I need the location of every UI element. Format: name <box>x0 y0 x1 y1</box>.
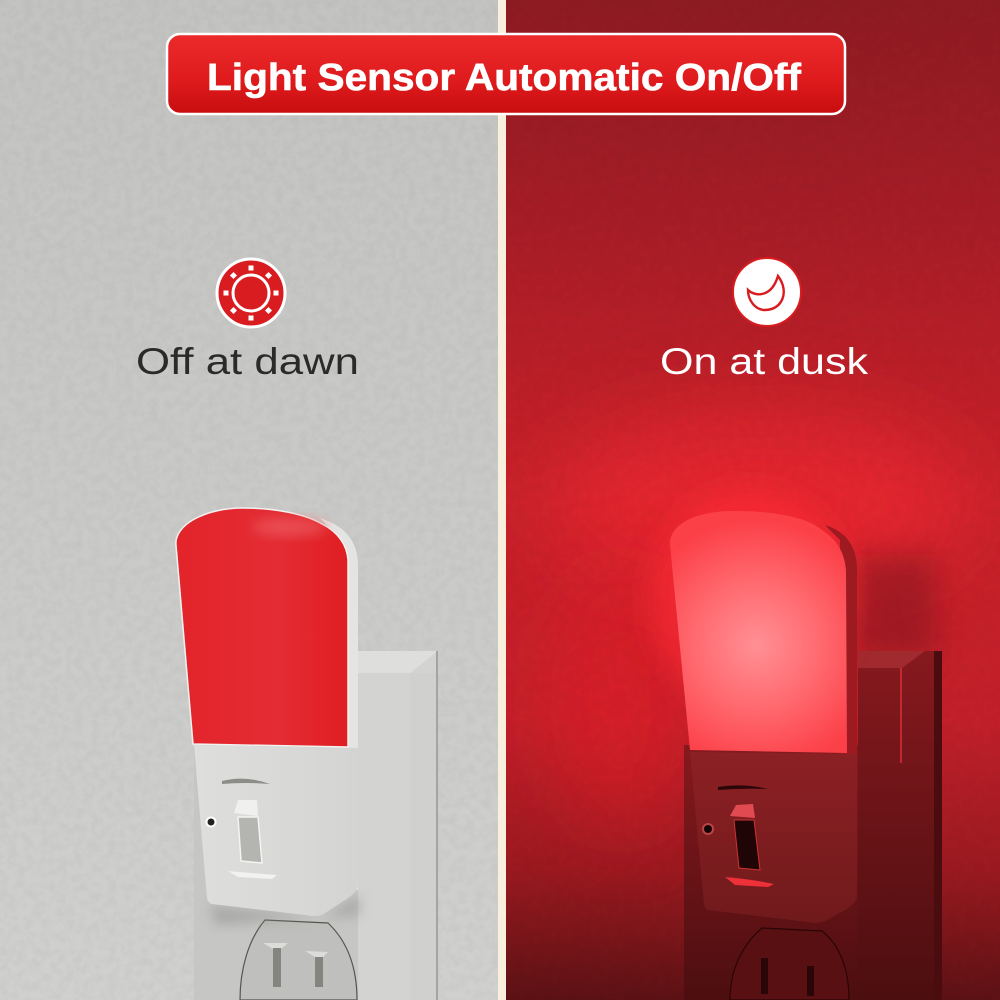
panel: on at dusk wall <box>506 0 1000 1000</box>
housing side strip <box>320 518 358 890</box>
icon: sun <box>217 259 285 327</box>
wall shadow <box>855 555 935 655</box>
glowing shade <box>670 511 847 753</box>
switch <box>206 779 277 879</box>
housing side strip <box>825 525 857 770</box>
night light on, glowing <box>650 490 942 1000</box>
base <box>194 745 358 916</box>
label: off at dawn: Off at dawn <box>136 341 359 382</box>
red shade <box>176 508 348 747</box>
divider strip <box>498 0 506 1000</box>
panel: off at dawn wall <box>0 0 498 1000</box>
icon: moon <box>733 258 801 326</box>
housing shadow <box>210 895 360 925</box>
switch <box>702 785 774 887</box>
night light off on outlet <box>176 508 438 1000</box>
outlet <box>730 928 849 1000</box>
wall plate <box>684 651 942 1000</box>
title banner <box>167 34 845 114</box>
title banner: Light Sensor Automatic On/Off <box>207 57 801 99</box>
wall plate <box>194 651 438 1000</box>
outer glow <box>650 490 850 710</box>
label: on at dusk: On at dusk <box>660 341 869 382</box>
outlet <box>240 920 357 1000</box>
base <box>690 752 857 923</box>
